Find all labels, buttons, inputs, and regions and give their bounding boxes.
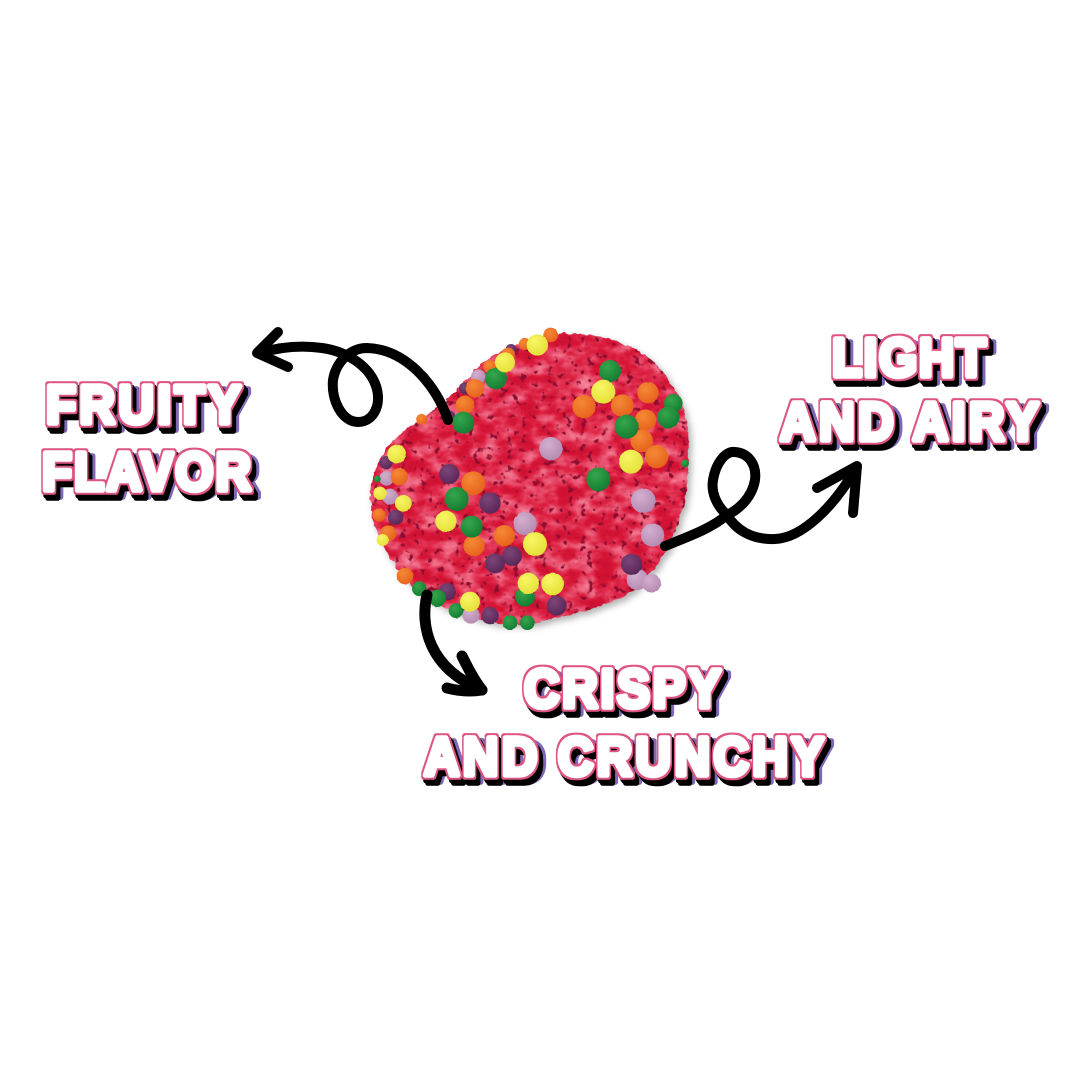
arrow: scoop to light and airy — [665, 452, 857, 546]
sprinkle: purple edge — [388, 510, 403, 525]
label: fruity flavor — [42, 374, 251, 502]
label: crispy and crunchy: AND CRUNCHY — [424, 726, 824, 787]
arrow: scoop to crispy and crunchy — [425, 595, 482, 691]
label: light and airy — [780, 327, 1039, 452]
sprinkles — [372, 328, 689, 630]
sprinkles: lilac — [379, 369, 664, 624]
label: light and airy: LIGHT — [832, 327, 986, 388]
sprinkles: green — [374, 360, 689, 630]
label: fruity flavor: FRUITY — [46, 374, 241, 435]
scoop body — [371, 334, 689, 624]
sprinkles: orange — [372, 328, 668, 584]
sprinkles: purple — [379, 344, 567, 624]
label: fruity flavor: FLAVOR — [42, 441, 251, 502]
sprinkles: yellow — [373, 334, 643, 612]
illustration: ice cream scoop with candy sprinkles — [371, 328, 689, 630]
sprinkle: purple front — [621, 554, 642, 575]
label: light and airy: AND AIRY — [780, 391, 1039, 452]
label: crispy and crunchy: CRISPY — [524, 658, 721, 719]
arrow: scoop to fruity flavor — [257, 332, 448, 422]
label: crispy and crunchy — [424, 658, 824, 787]
